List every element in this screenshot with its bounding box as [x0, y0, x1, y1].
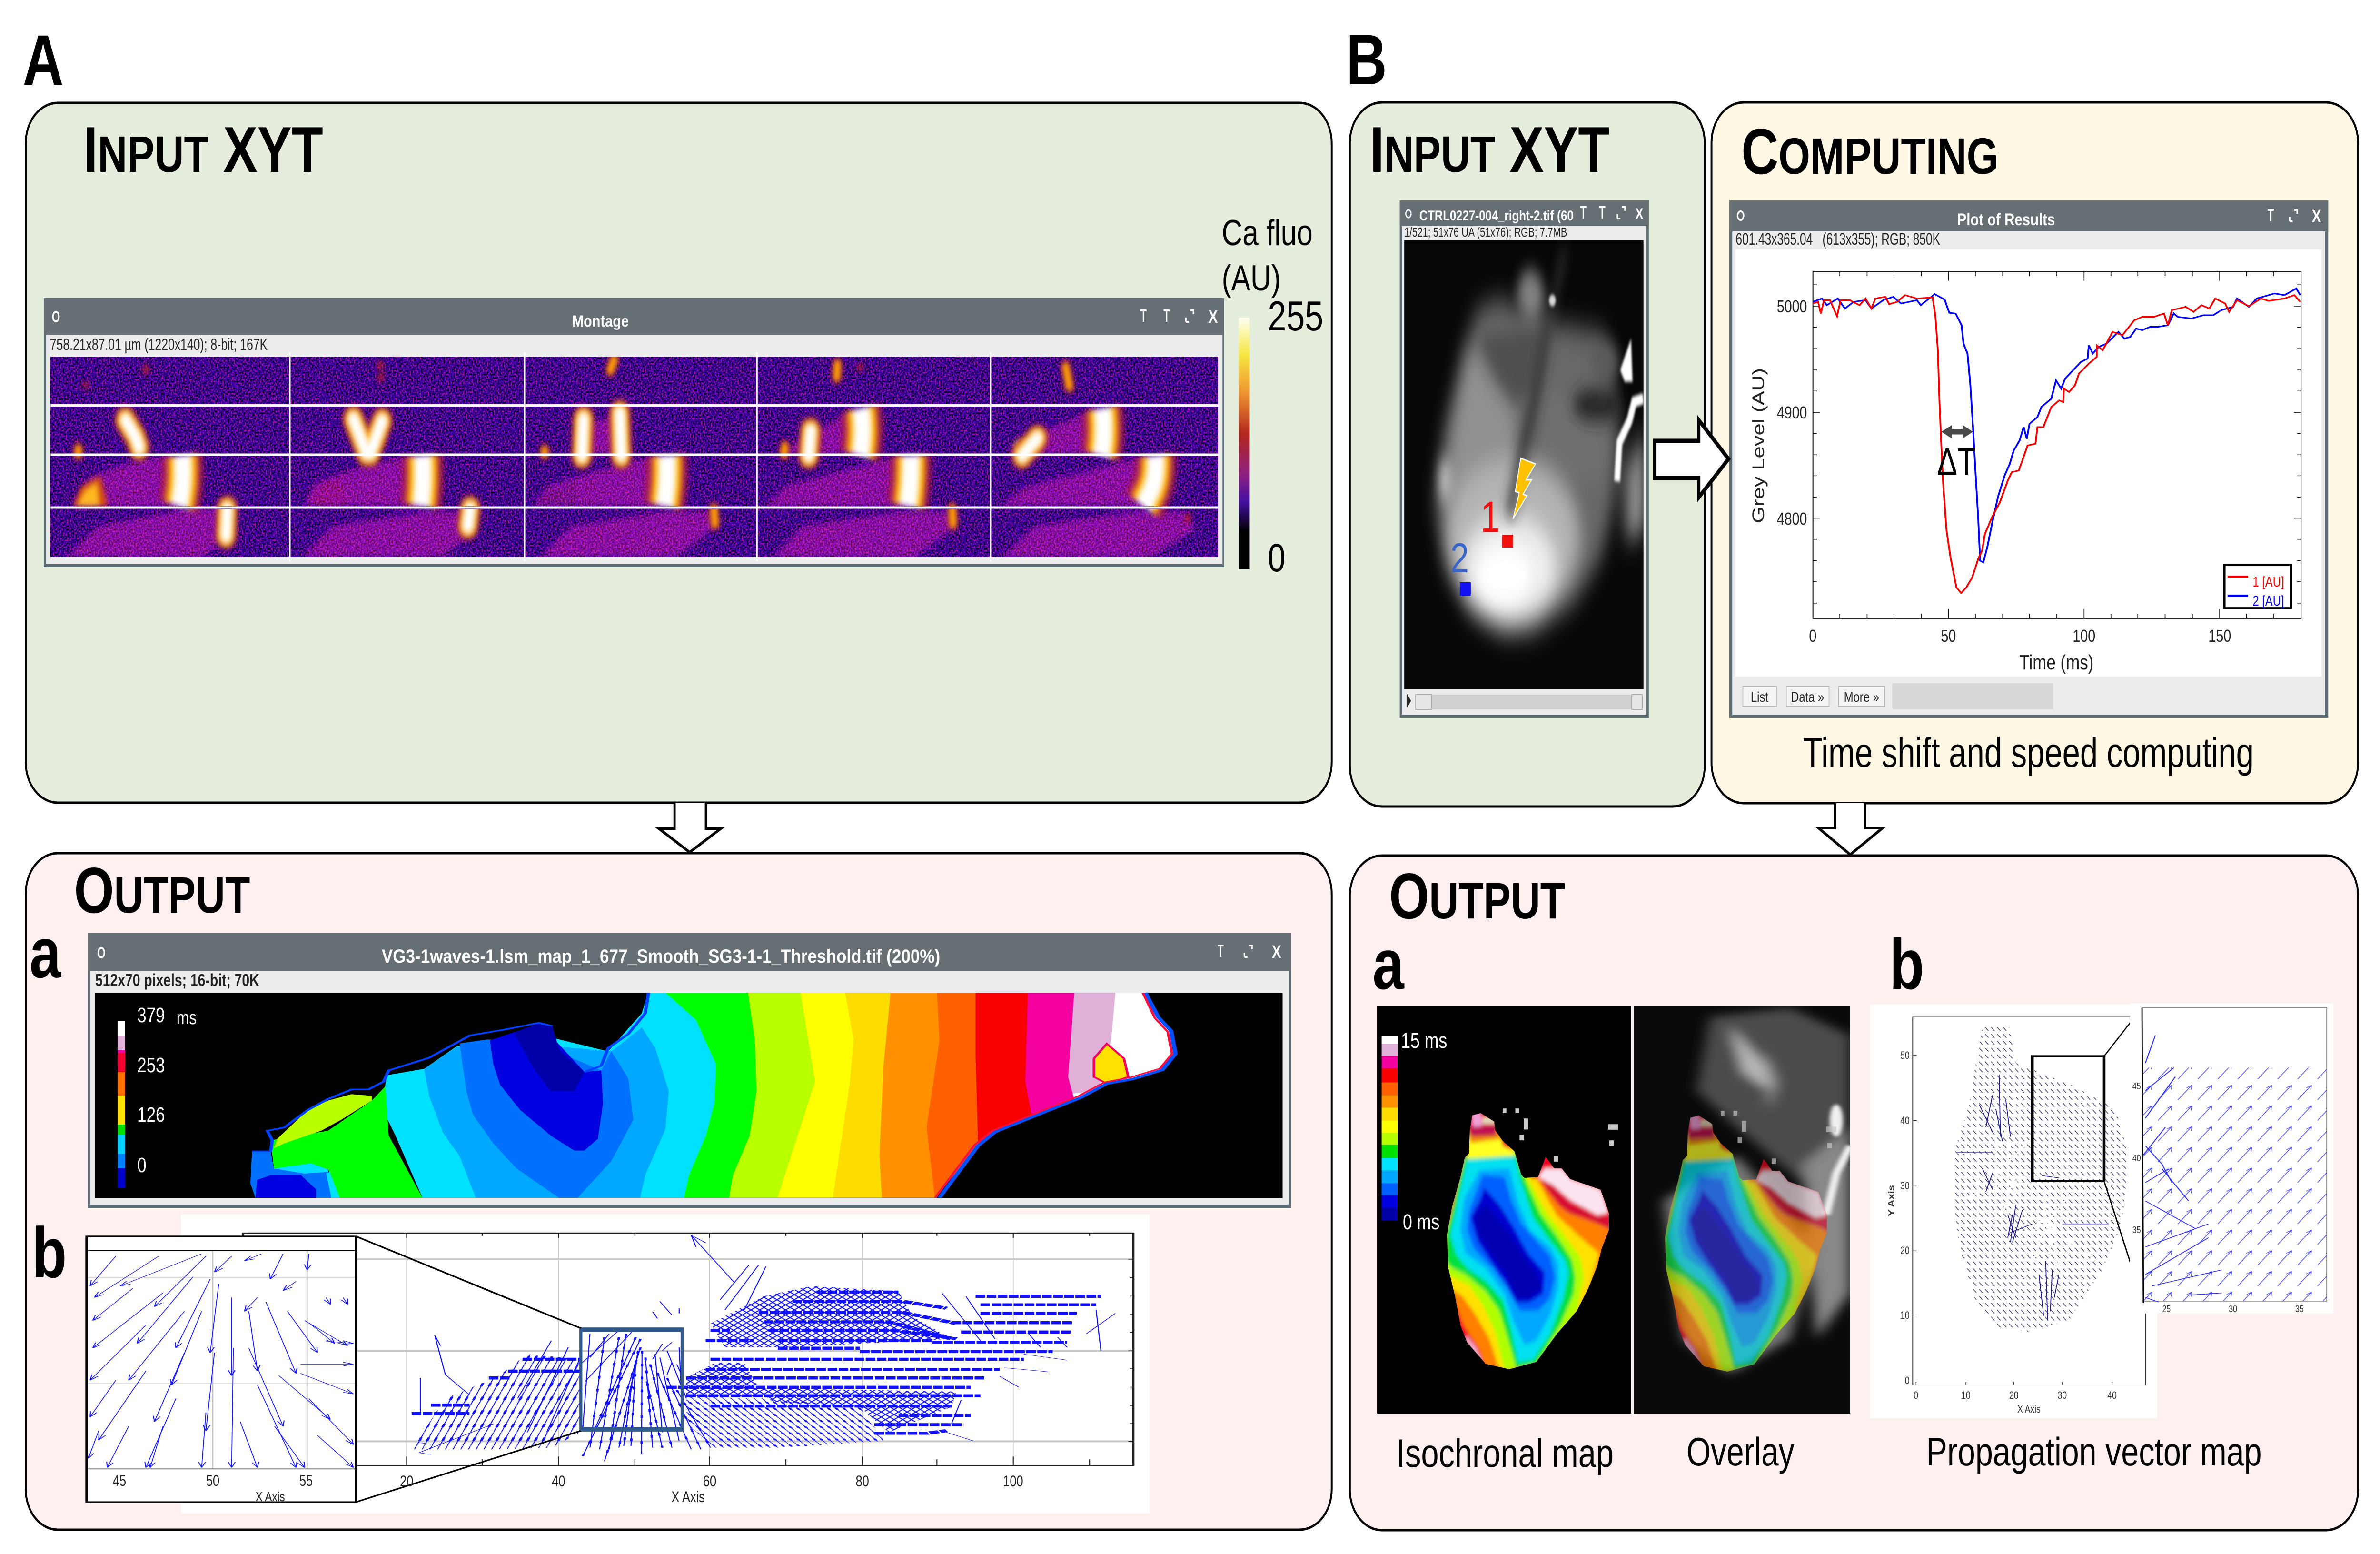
curve: trace 2	[1813, 289, 2300, 562]
vector map with inset: 40	[552, 1473, 565, 1490]
vector map with inset: 80	[856, 1473, 869, 1490]
propagation vector map: 20	[1900, 1245, 1910, 1257]
plot buttons: Data »	[1791, 688, 1824, 705]
vector map with inset: 60	[703, 1473, 716, 1490]
legend: time scale in ms	[118, 1004, 197, 1188]
caption: isochronal map: Isochronal map	[1396, 1431, 1614, 1476]
inset zoom	[87, 1236, 356, 1502]
window: plot of results	[1729, 200, 2328, 718]
window: heart fluorescence image: X	[1635, 206, 1643, 223]
propagation vector map: 0	[1905, 1375, 1910, 1387]
caption: overlay: Overlay	[1686, 1430, 1795, 1474]
line chart: 4800	[1777, 509, 1807, 528]
marker 2	[1450, 534, 1471, 596]
legend: time scale in ms: 253	[137, 1054, 165, 1077]
propagation vector map: 30	[1900, 1180, 1910, 1192]
line chart: ΔT	[1937, 441, 1976, 483]
label b: b	[32, 1213, 67, 1293]
propagation vector map: 25	[2162, 1304, 2171, 1314]
marker 1: 1	[1481, 492, 1500, 541]
legend: time scale in ms: 126	[137, 1103, 165, 1126]
window: heart fluorescence image: 1/521; 51x76 UA (51x76); RGB; 7.7MB	[1404, 225, 1567, 240]
legend: time scale in ms: 0	[137, 1154, 147, 1177]
propagation vector map: 40	[2107, 1390, 2117, 1402]
window: isochronal map	[88, 933, 1291, 1208]
heading: computing: COMPUTING	[1741, 116, 1998, 188]
vector map with inset: X Axis	[256, 1490, 285, 1504]
colour scale: calcium fluorescence	[1222, 212, 1323, 580]
window: montage: X	[1208, 307, 1218, 327]
vector field	[412, 1235, 1115, 1461]
vector map with inset: X Axis	[671, 1489, 705, 1506]
panel: computing	[1712, 102, 2358, 803]
overlay map	[1634, 1006, 1850, 1414]
line chart: 4900	[1777, 403, 1807, 422]
propagation vector map: 10	[1900, 1310, 1910, 1322]
panel: A input XYT	[26, 103, 1332, 803]
colour scale: calcium fluorescence: (AU)	[1222, 258, 1281, 299]
window: montage	[44, 298, 1224, 567]
propagation vector map: 40	[1900, 1115, 1910, 1127]
panel: B output	[1350, 856, 2358, 1530]
window: heart fluorescence image: CTRL0227-004_right-2.tif (60	[1419, 207, 1574, 224]
window: plot of results: 601.43x365.04 (613x355); RGB; 850K	[1735, 229, 1940, 249]
heading: input XYT: INPUT XYT	[1370, 114, 1609, 186]
marker 1	[1481, 492, 1513, 548]
window: heart fluorescence image	[1400, 200, 1649, 718]
vector map with inset: 55	[299, 1473, 313, 1490]
propagation vector map	[1870, 1003, 2333, 1418]
propagation vector map: 35	[2295, 1304, 2304, 1314]
icon: lightning stimulus	[1513, 458, 1536, 519]
vector map with inset: 45	[113, 1473, 126, 1490]
isochronal map: 0 ms	[1403, 1210, 1439, 1234]
propagation vector map: 30	[2058, 1390, 2067, 1402]
colour scale: calcium fluorescence: 0	[1268, 536, 1286, 580]
window: isochronal map: 512x70 pixels; 16-bit; 70K	[95, 971, 259, 990]
propagation vector map: X Axis	[2017, 1404, 2041, 1415]
calcium montage frames	[50, 352, 1218, 561]
line chart	[1749, 271, 2301, 674]
line chart: Grey Level (AU)	[1749, 368, 1768, 523]
heading: input XYT: INPUT XYT	[83, 114, 323, 186]
vector map with inset: 100	[1003, 1473, 1023, 1490]
line chart: 5000	[1777, 297, 1807, 316]
propagation vector map: 0	[1914, 1390, 1918, 1402]
panel letter A: A	[23, 20, 64, 100]
panel letter B: B	[1346, 20, 1387, 100]
time colour bar	[1382, 1036, 1398, 1221]
double arrow: time delay	[1942, 425, 1973, 438]
window: montage: 758.21x87.01 µm (1220x140); 8-bit; 167K	[50, 335, 268, 354]
scrollbar	[1407, 693, 1642, 709]
propagation vector map: 40	[2132, 1153, 2141, 1163]
propagation vector map: 45	[2132, 1081, 2141, 1091]
vector map with inset: 20	[400, 1473, 413, 1490]
arrow: computing to output	[1818, 803, 1883, 855]
line chart: 100	[2073, 627, 2095, 646]
plot buttons: List	[1751, 688, 1768, 705]
propagation vector map: 10	[1961, 1390, 1971, 1402]
isochronal map: 15 ms	[1401, 1028, 1447, 1053]
chart legend	[2224, 565, 2291, 608]
plot buttons	[1743, 683, 2053, 709]
plot buttons: More »	[1844, 688, 1879, 705]
arrow: input to computing	[1655, 420, 1728, 498]
caption: propagation vector map: Propagation vector map	[1926, 1430, 2262, 1474]
colour scale: calcium fluorescence: 255	[1268, 292, 1323, 339]
panel: B input XYT	[1350, 102, 1705, 807]
window: plot of results: X	[2312, 207, 2321, 227]
legend: time scale in ms: 379	[137, 1004, 165, 1027]
label a: a	[30, 913, 62, 993]
line chart: 1 [AU]	[2252, 573, 2284, 590]
arrow: A input to output	[659, 803, 721, 852]
curve: trace 1	[1813, 295, 2300, 593]
line chart: Time (ms)	[2019, 651, 2093, 674]
propagation vector map: 50	[1900, 1050, 1910, 1062]
window: isochronal map: X	[1272, 942, 1281, 962]
isochronal map	[1377, 1006, 1631, 1414]
inset zoom	[2130, 1003, 2333, 1314]
label a: a	[1372, 924, 1405, 1004]
propagation vector map: 30	[2229, 1304, 2237, 1314]
window: plot of results: Plot of Results	[1957, 210, 2055, 229]
panel: A output	[26, 853, 1332, 1530]
legend: time scale in ms: ms	[177, 1006, 197, 1028]
colour scale: calcium fluorescence: Ca fluo	[1222, 212, 1313, 253]
line chart: 2 [AU]	[2252, 592, 2284, 609]
window: isochronal map: VG3-1waves-1.lsm_map_1_677_Smooth_SG3-1-1_Threshold.tif (200%)	[382, 945, 940, 967]
line chart: 50	[1941, 627, 1956, 646]
line chart: 150	[2209, 627, 2231, 646]
heading: output: OUTPUT	[1389, 860, 1565, 933]
caption: time shift: Time shift and speed computing	[1803, 729, 2254, 776]
line chart: 0	[1809, 627, 1816, 646]
label b: b	[1890, 924, 1924, 1004]
propagation vector map: 35	[2132, 1225, 2141, 1235]
propagation vector map: Y Axis	[1887, 1185, 1896, 1216]
vector map with inset: 50	[206, 1473, 219, 1490]
heading: output: OUTPUT	[74, 855, 250, 927]
propagation vector map: 20	[2009, 1390, 2018, 1402]
marker 2: 2	[1450, 534, 1469, 581]
vector map with inset	[87, 1215, 1150, 1514]
window: montage: Montage	[572, 312, 629, 330]
